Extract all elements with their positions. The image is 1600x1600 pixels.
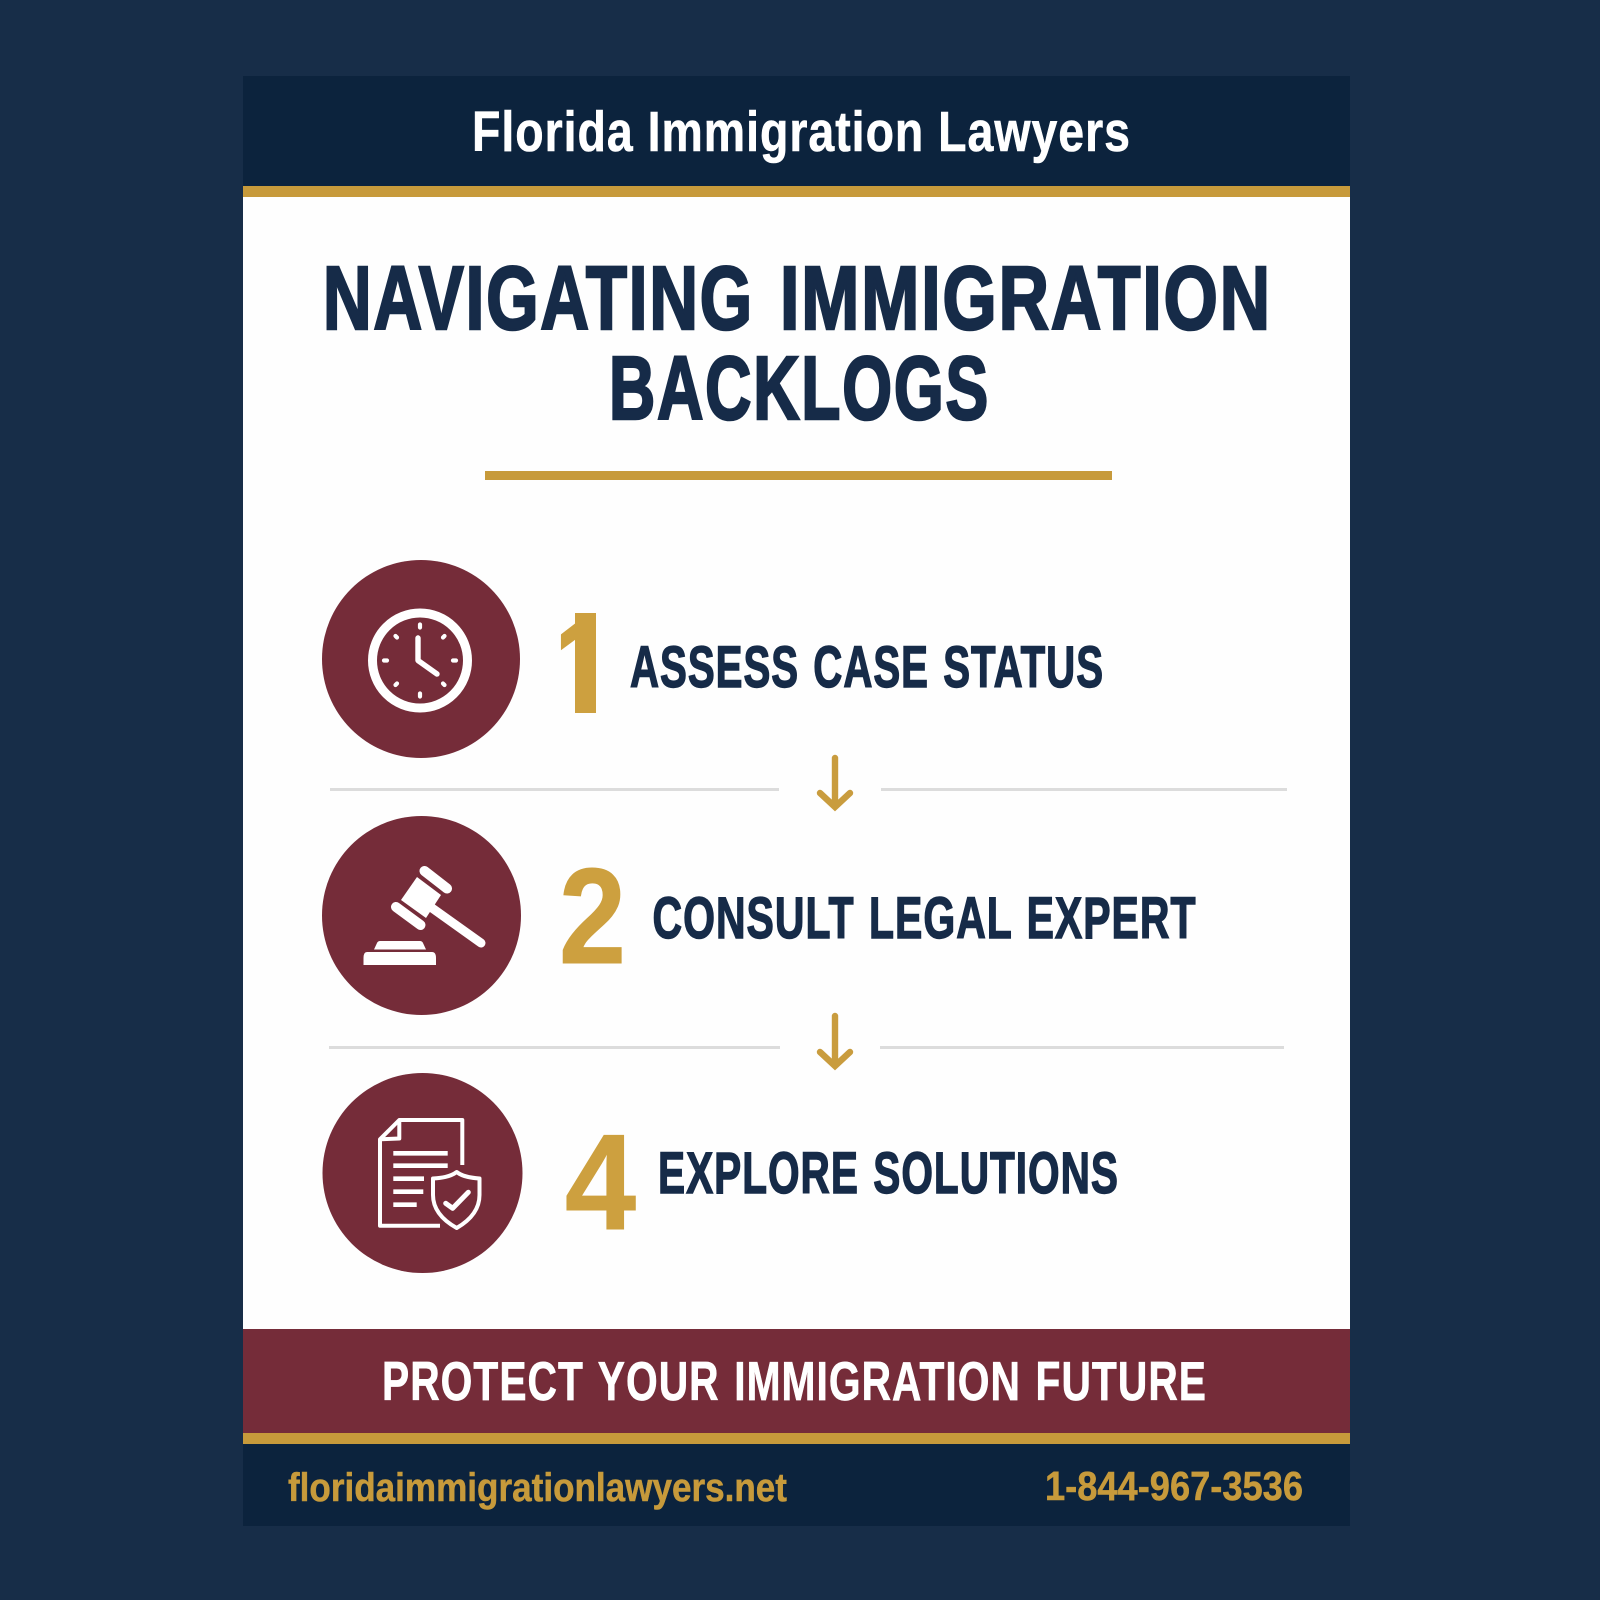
- panel: contact footer: [243, 1433, 1350, 1526]
- heading underline: [485, 471, 1112, 480]
- step number 1: 1: [554, 590, 618, 742]
- step label 1: ASSESS CASE STATUS: [630, 635, 1104, 700]
- step label 3: EXPLORE SOLUTIONS: [658, 1141, 1119, 1206]
- step number 4: 4: [565, 1106, 636, 1258]
- icon: document with shield: [322, 1073, 522, 1273]
- panel: poster card: [243, 76, 1350, 1526]
- heading: [323, 249, 1272, 439]
- heading: NAVIGATING: [323, 249, 754, 349]
- step 1: [322, 560, 1104, 758]
- step 3: [322, 1073, 1119, 1273]
- icon: clock: [322, 560, 520, 758]
- panel: call to action banner: [243, 1329, 1350, 1433]
- step number 2: 2: [559, 840, 626, 992]
- call to action text: PROTECT YOUR IMMIGRATION FUTURE: [382, 1350, 1207, 1412]
- step 2: [322, 816, 1196, 1015]
- heading: BACKLOGS: [609, 339, 990, 439]
- website: floridaimmigrationlawyers.net: [288, 1466, 787, 1510]
- arrow: step 2 to step 3: [329, 1016, 1284, 1066]
- panel: card body: [243, 197, 1350, 1329]
- step number 1: [560, 613, 596, 713]
- icon: gavel: [322, 816, 521, 1015]
- arrow: step 1 to step 2: [330, 758, 1287, 807]
- step label 2: CONSULT LEGAL EXPERT: [652, 886, 1196, 951]
- panel: firm header: [243, 76, 1350, 197]
- phone number: 1-844-967-3536: [1045, 1463, 1303, 1509]
- firm name: Florida Immigration Lawyers: [472, 100, 1131, 164]
- infographic page: [243, 76, 1350, 1526]
- heading: IMMIGRATION: [780, 249, 1272, 349]
